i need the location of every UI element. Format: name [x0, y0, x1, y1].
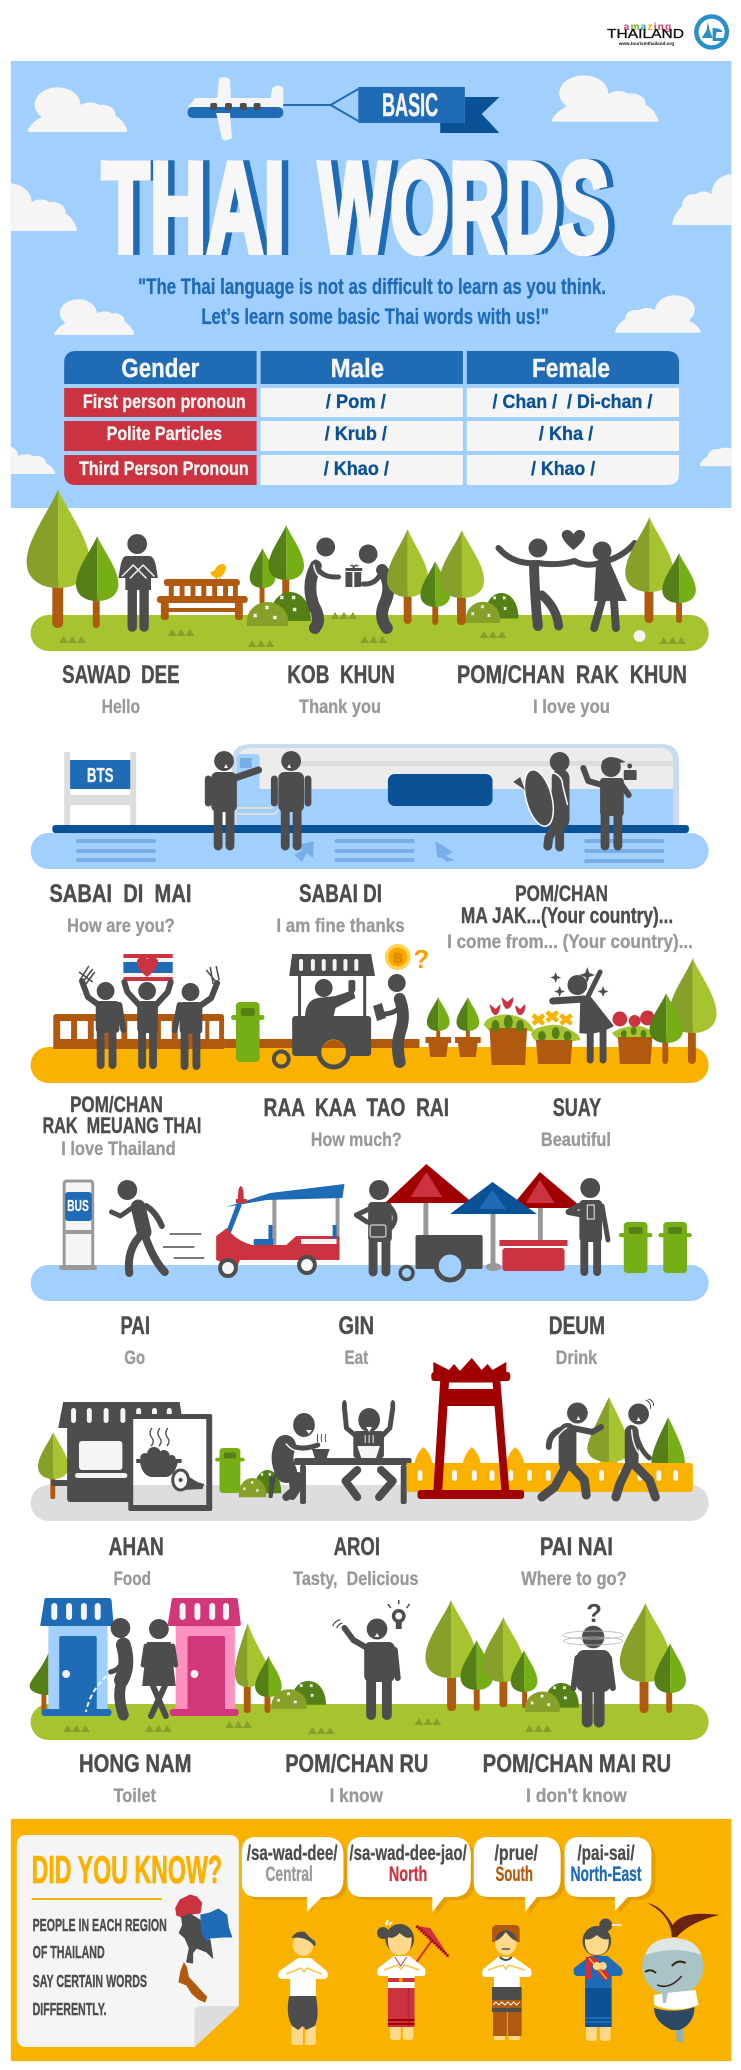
trees centre right: [425, 1600, 579, 1712]
person: right cheering: [175, 966, 219, 1066]
logo: amazing thailand: amazing: [624, 22, 671, 33]
caption: beautiful: Beautiful: [541, 1129, 611, 1150]
table: pronouns by gender: / Pom /: [326, 391, 387, 412]
grass tufts: [63, 1718, 552, 1734]
caption: i love thailand: I love Thailand: [61, 1138, 176, 1159]
table: pronouns by gender: Female: [532, 355, 610, 383]
person: i know: [333, 1618, 398, 1715]
table: [294, 1458, 412, 1504]
intro text: Let’s learn some basic Thai words with us!": [201, 304, 549, 329]
person: beautiful woman: [550, 967, 614, 1060]
panel: scene 6 toilets and knowing: [30, 1598, 709, 1806]
caption: i am fine thanks: [276, 881, 405, 936]
table: pronouns by gender: Third Person Pronoun: [79, 458, 249, 479]
speech bubble: north: North: [389, 1863, 427, 1886]
caption: beautiful: [541, 1095, 611, 1150]
caption: go: [120, 1313, 150, 1368]
caption: eat: Eat: [344, 1347, 369, 1368]
green bins: [619, 1222, 692, 1273]
speech bubble: central: Central: [266, 1863, 313, 1886]
caption: thank you: [287, 662, 395, 717]
figure: northern woman: [377, 1920, 449, 2040]
caption: food: Food: [114, 1568, 151, 1589]
person: customer: [373, 974, 406, 1062]
caption: toilet: HONG NAM: [79, 1751, 191, 1778]
person: couple in love: [498, 530, 635, 628]
speech bubble: south: South: [495, 1863, 533, 1886]
table: pronouns by gender: Gender: [121, 355, 199, 383]
caption: i know: I know: [330, 1785, 383, 1806]
caption: tasty: Tasty, Delicious: [293, 1568, 418, 1589]
caption: i love thailand: RAK MEUANG THAI: [42, 1113, 201, 1138]
speech bubble: north-east: [565, 1837, 655, 1914]
logo: round seal: [696, 16, 727, 48]
tuk-tuk: [216, 1184, 344, 1276]
caption: how much: RAA KAA TAO RAI: [264, 1095, 449, 1122]
table: pronouns by gender: / Krub /: [325, 423, 388, 444]
body text: DIFFERENTLY.: [33, 1999, 107, 2019]
icon: airplane towing banner: [188, 77, 499, 140]
caption: i come from: I come from... (Your country)...: [447, 931, 693, 952]
caption: i come from: POM/CHAN: [515, 881, 608, 906]
caption: i don't know: I don't know: [526, 1785, 627, 1806]
person: waving at train: [208, 751, 259, 846]
bench: [157, 579, 248, 620]
blue toilet: [40, 1598, 114, 1716]
person: eating: [356, 1180, 395, 1272]
caption: beautiful: SUAY: [553, 1095, 601, 1122]
speech bubble: north-east: North-East: [570, 1863, 642, 1886]
speech bubble: south: /prue/: [494, 1842, 538, 1865]
ground: [31, 833, 709, 869]
caption: i love you: [457, 662, 687, 717]
panel: scene 2 train station: [31, 744, 709, 952]
title: THAI: [108, 136, 292, 280]
train: [232, 744, 679, 825]
title: [102, 136, 616, 280]
logo: amazing thailand: [607, 22, 684, 46]
caption: i don't know: [483, 1751, 671, 1806]
green bin: [231, 1002, 265, 1062]
flower pots: [484, 997, 655, 1065]
figure: north-eastern woman: [574, 1918, 623, 2041]
potted plants: [425, 997, 481, 1057]
market stalls and umbrellas: [385, 1164, 582, 1280]
person: receiving gift: [359, 544, 388, 628]
caption: where to go: [521, 1534, 627, 1589]
caption: how much: [264, 1095, 449, 1150]
trees and bush middle: [247, 525, 311, 626]
caption: eat: [339, 1313, 374, 1368]
body text: SAY CERTAIN WORDS: [33, 1971, 147, 1991]
ground: [31, 1704, 709, 1740]
table: pronouns by gender: / Khao /: [531, 458, 596, 479]
person: drinking: [569, 1178, 608, 1272]
grass tufts: [59, 612, 686, 647]
trees middle right: [387, 529, 518, 625]
sign: bus stop: BUS: [67, 1198, 89, 1215]
person: backpacker: [513, 752, 569, 847]
wooden fence: [53, 1014, 419, 1049]
intro text: "The Thai language is not as difficult to learn as you think.: [138, 274, 606, 299]
caption: i know: [285, 1751, 428, 1806]
caption: i am fine thanks: I am fine thanks: [276, 915, 405, 936]
speech bubble: central: /sa-wad-dee/: [247, 1842, 338, 1865]
caption: tasty: AROI: [334, 1534, 380, 1561]
body text: OF THAILAND: [33, 1942, 105, 1962]
panel: scene 1 park greetings: [27, 489, 709, 717]
icon: white bird: [634, 630, 645, 642]
caption: how are you: SABAI DI MAI: [49, 881, 191, 908]
figure: southern man: [482, 1925, 532, 2040]
icon: baht coin and question mark: ?: [414, 946, 429, 974]
table: pronouns by gender: / Khao /: [324, 458, 390, 479]
caption: i love you: POM/CHAN RAK KHUN: [457, 662, 687, 689]
restaurant shop: [58, 1402, 184, 1502]
giant swing: [418, 1358, 524, 1499]
tree left: [30, 1653, 48, 1713]
caption: i love thailand: [42, 1092, 201, 1159]
caption: food: [109, 1534, 164, 1589]
trees right: [649, 958, 717, 1064]
caption: hello: [62, 662, 180, 717]
panel: scene 4 street: [31, 1164, 709, 1368]
temple wall: [407, 1447, 693, 1492]
trees and bushes: [235, 1623, 326, 1713]
caption: drink: Drink: [556, 1347, 598, 1368]
caption: tasty: [293, 1534, 418, 1589]
caption: i come from: [447, 881, 693, 952]
person: i don't know: ?: [586, 1600, 602, 1628]
caption: i don't know: POM/CHAN MAI RU: [483, 1751, 671, 1778]
person: centre cheering: [124, 982, 171, 1065]
person: praying: [118, 534, 158, 627]
table: pronouns by gender: / Chan / / Di-chan /: [493, 391, 653, 412]
sign: bus stop: [59, 1181, 97, 1270]
green bin and bush: [215, 1448, 281, 1497]
caption: where to go: Where to go?: [521, 1568, 627, 1589]
sign: BTS station: BTS: [87, 765, 114, 787]
caption: i love thailand: POM/CHAN: [70, 1092, 163, 1117]
caption: go: Go: [124, 1347, 145, 1368]
caption: how are you: How are you?: [67, 915, 175, 936]
panel: header sky: [0, 61, 741, 508]
person: man at toilet: [86, 1618, 130, 1715]
heading: DID YOU KNOW?: [32, 1849, 222, 1892]
figure: central man: [278, 1932, 328, 2045]
person: standing reply: [274, 751, 308, 846]
panel: scene 3 market: [31, 944, 717, 1159]
ground: [31, 1265, 709, 1301]
caption: i come from: MA JAK...(Your country)...: [461, 903, 673, 928]
title: THAI: [102, 136, 285, 280]
person: left cheering: [79, 966, 123, 1065]
caption: eat: GIN: [339, 1313, 374, 1340]
icon: gift box: [345, 565, 362, 587]
note card: [17, 1835, 239, 2047]
table: pronouns by gender: / Kha /: [539, 423, 594, 444]
menu board with bowl and ham: [128, 1414, 212, 1511]
icon: baht coin and question mark: ฿: [393, 948, 404, 967]
person: running: [112, 1180, 165, 1273]
ground: [31, 1485, 709, 1521]
speech bubble: north: /sa-wad-dee-jao/: [349, 1842, 467, 1865]
person: giving thanks: [310, 538, 339, 628]
body text: PEOPLE IN EACH REGION: [33, 1915, 167, 1935]
table: pronouns by gender: First person pronoun: [83, 391, 246, 412]
caption: food: AHAN: [109, 1534, 164, 1561]
person: photographer: [583, 757, 637, 846]
caption: i love you: I love you: [533, 696, 610, 717]
food cart: [274, 954, 375, 1069]
trees left: [27, 489, 118, 628]
platform edge: [52, 825, 689, 833]
caption: how much: How much?: [311, 1129, 402, 1150]
tree left: [38, 1432, 69, 1499]
pink toilet: [168, 1598, 241, 1716]
logo: amazing thailand: THAILAND: [607, 26, 684, 41]
caption: i am fine thanks: SABAI DI: [299, 881, 382, 908]
panel: scene 5 food and temple: [31, 1358, 709, 1589]
intro text: [138, 274, 606, 329]
table: pronouns by gender: [64, 351, 679, 485]
person: sitting eating: [268, 1413, 330, 1498]
ground: [31, 1047, 709, 1083]
person: walking behind: [616, 1399, 655, 1497]
ground: [31, 615, 709, 651]
caption: drink: [549, 1313, 605, 1368]
caption: go: PAI: [120, 1313, 150, 1340]
person: delicious: [342, 1400, 395, 1497]
figure: mascot: [642, 1903, 719, 2042]
icon: light bulb: [388, 1600, 410, 1629]
logo: amazing thailand: www.tourismthailand.org: [618, 41, 674, 46]
caption: thank you: KOB KHUN: [287, 662, 395, 689]
caption: drink: DEUM: [549, 1313, 605, 1340]
caption: i know: POM/CHAN RU: [285, 1751, 428, 1778]
trees behind walkers: [587, 1397, 685, 1463]
person: woman at toilet: [142, 1619, 176, 1716]
table: pronouns by gender: Polite Particles: [107, 423, 222, 444]
table: pronouns by gender: Male: [331, 355, 384, 383]
sign: BTS station: [64, 752, 136, 825]
caption: where to go: PAI NAI: [540, 1534, 613, 1561]
speed lines: [163, 1234, 204, 1258]
trees right: [625, 517, 696, 623]
trees right: [620, 1603, 686, 1713]
person: walking ahead: [542, 1402, 601, 1497]
clouds: [0, 75, 741, 474]
icon: yellow bird: [210, 564, 226, 580]
platform markings and arrows: [76, 839, 664, 863]
caption: hello: SAWAD DEE: [62, 662, 180, 689]
caption: thank you: Thank you: [299, 696, 381, 717]
speech bubble: north: [347, 1837, 475, 1915]
panel: did you know: [11, 1819, 731, 2061]
speech bubble: south: [474, 1837, 565, 1915]
map of Thailand: [176, 1895, 232, 2002]
caption: how are you: [49, 881, 191, 936]
speech bubble: north-east: /pai-sai/: [577, 1842, 635, 1865]
caption: toilet: [79, 1751, 191, 1806]
icon: baht coin and question mark: [385, 944, 429, 974]
body text: [33, 1915, 167, 2019]
flag with heart: [123, 954, 173, 981]
person: i don't know: [563, 1600, 624, 1722]
speech bubble: central: [242, 1837, 347, 1915]
icon: airplane towing banner: BASIC: [382, 87, 438, 123]
caption: toilet: Toilet: [114, 1785, 157, 1806]
logos top right: [607, 16, 727, 48]
caption: hello: Hello: [102, 696, 140, 717]
